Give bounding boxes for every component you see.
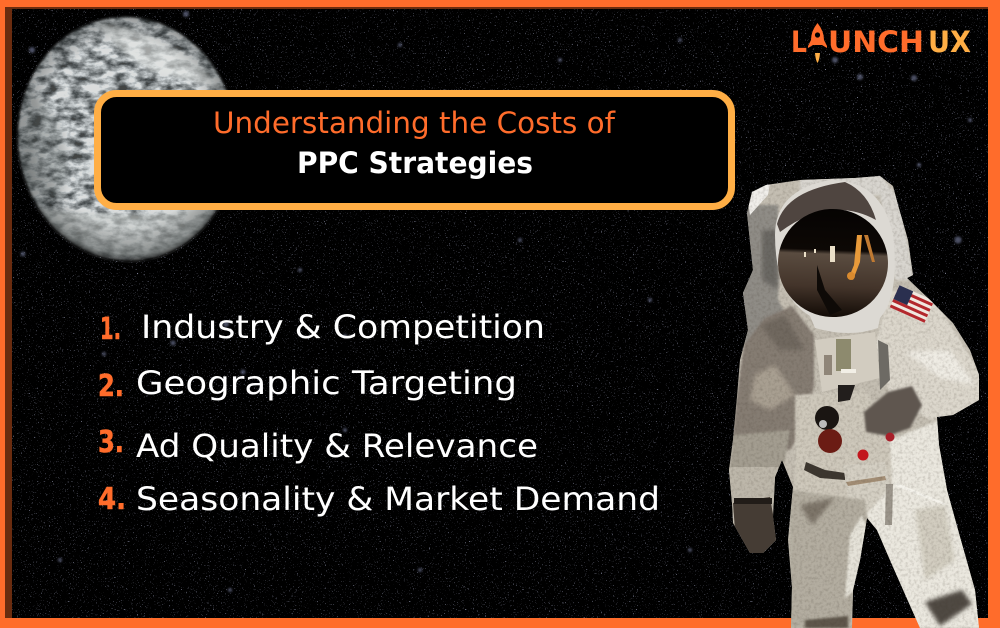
glove, left hand <box>733 497 776 555</box>
texture grain <box>725 170 985 628</box>
glove, right hand <box>864 386 922 436</box>
astronaut <box>725 170 985 628</box>
logo letter L: L <box>791 25 807 59</box>
icon: US flag patch <box>890 285 934 323</box>
icon: planet earth <box>16 16 228 262</box>
lower flap and strap <box>844 472 870 513</box>
right leg, bright <box>866 420 985 628</box>
title line 1: Understanding the Costs of <box>213 106 616 140</box>
item 1: Industry & Competition <box>141 308 545 346</box>
left leg <box>790 490 868 628</box>
logo: LaunchUX <box>791 23 971 63</box>
logo letters UX: UX <box>928 25 971 59</box>
torso <box>794 392 891 496</box>
helmet shadow <box>777 182 876 232</box>
item 2: 2. <box>98 369 124 404</box>
helmet shell <box>775 180 895 333</box>
upper left arm, shaded <box>732 306 814 450</box>
title line 2: PPC Strategies <box>297 146 533 180</box>
backpack <box>743 204 784 344</box>
logo letters UNCH: UNCH <box>828 25 924 59</box>
suit base <box>725 170 985 628</box>
item 2: Geographic Targeting <box>136 364 517 402</box>
item 4: Seasonality & Market Demand <box>136 480 660 518</box>
item 3: Ad Quality & Relevance <box>136 427 538 465</box>
chest red and chrome details <box>815 406 839 430</box>
title box <box>98 94 732 206</box>
item 1: 1. <box>100 312 121 347</box>
item 3: 3. <box>98 425 124 460</box>
chest control unit <box>815 332 880 392</box>
forearm <box>730 430 790 480</box>
item 4: 4. <box>98 482 126 517</box>
visor <box>778 209 888 317</box>
dark gear under chest unit <box>838 385 855 402</box>
icon: rocket <box>808 23 827 63</box>
right sleeve, bright <box>875 290 985 420</box>
list <box>98 308 660 518</box>
